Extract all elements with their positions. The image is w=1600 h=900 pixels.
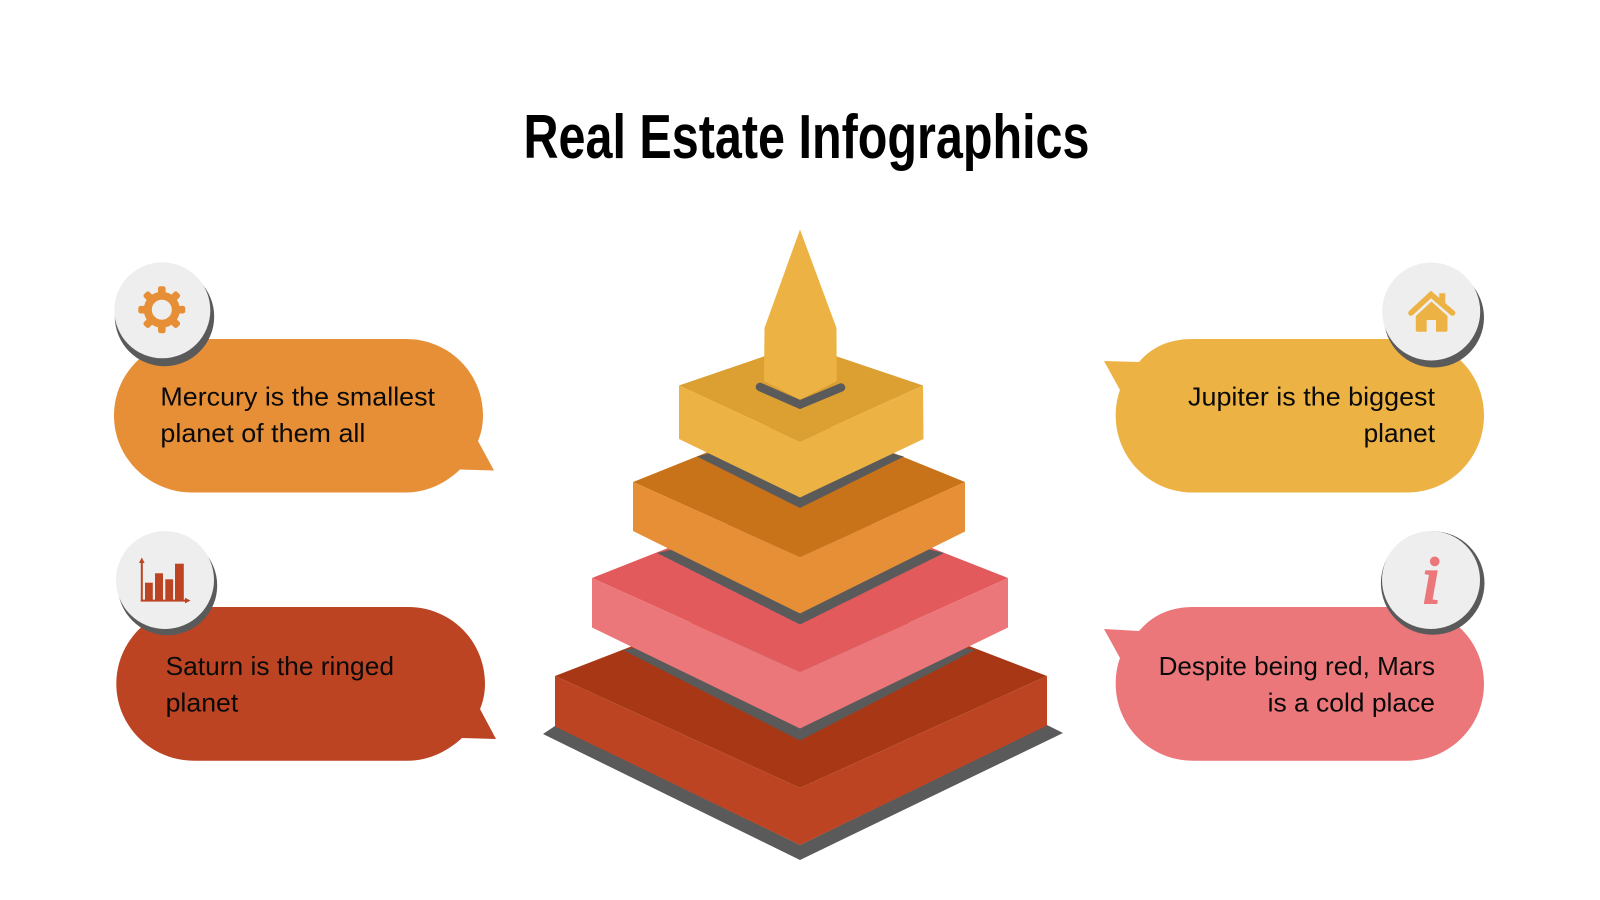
bubble: orange (114, 339, 494, 492)
callout text: planet (166, 688, 239, 718)
icon: info letter: i (1422, 542, 1440, 618)
callout text (1188, 382, 1436, 448)
tier 1 shadow (697, 430, 904, 508)
tier 3 shadow (623, 620, 975, 740)
callout: Mars (1104, 531, 1484, 761)
bubble: yellow (1104, 339, 1484, 492)
base shadow (543, 725, 1063, 860)
callout text: Jupiter is the biggest (1188, 382, 1436, 412)
callout text (1159, 651, 1435, 718)
icon badge: gear (114, 262, 214, 366)
callout text: Saturn is the ringed (166, 651, 394, 681)
icon badge: house (1382, 262, 1484, 368)
spire (764, 230, 837, 400)
icon badge: bar chart (116, 531, 217, 635)
callout: Jupiter (1104, 262, 1484, 492)
bubble: pink (1104, 607, 1484, 761)
callout text: planet of them all (160, 418, 365, 448)
tier 1: yellow (679, 344, 924, 498)
callout text: is a cold place (1268, 688, 1435, 718)
tier 2: orange (633, 415, 965, 614)
title: Real Estate Infographics (524, 103, 1090, 172)
icon: bar chart (139, 558, 190, 603)
tier 4: dark red (555, 581, 1047, 845)
pyramid illustration (543, 230, 1063, 860)
tier 3: pink (592, 496, 1008, 728)
spire shadow (760, 387, 841, 404)
bubble: red (116, 607, 496, 761)
icon: gear (138, 286, 185, 333)
icon: house (1411, 293, 1452, 332)
icon badge: info (1381, 531, 1484, 635)
callout text: Despite being red, Mars (1159, 651, 1435, 681)
callout text (166, 651, 394, 718)
callout: Mercury (114, 262, 494, 492)
callout text: Mercury is the smallest (160, 382, 436, 412)
callout: Saturn (116, 531, 496, 761)
callout text (160, 382, 436, 448)
callout text: planet (1364, 418, 1436, 448)
tier 2 shadow (657, 520, 944, 624)
